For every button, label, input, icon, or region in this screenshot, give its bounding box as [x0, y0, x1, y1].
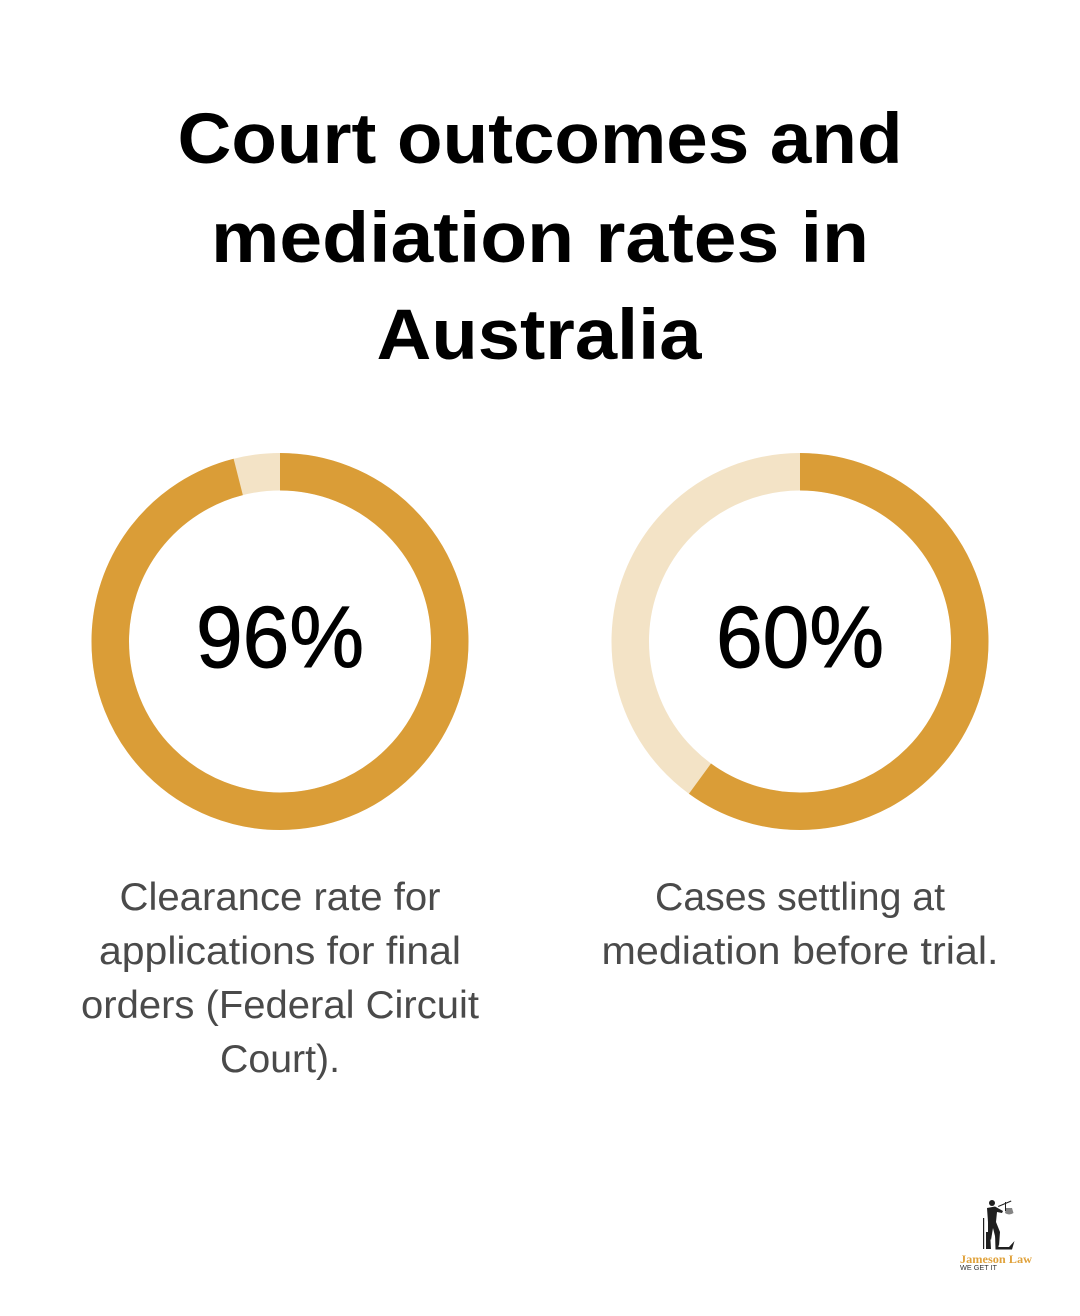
logo: Jameson Law	[960, 1200, 1033, 1272]
title	[178, 100, 902, 375]
description: mediation settlement: Cases settling at	[655, 876, 945, 919]
icon: lady justice	[983, 1200, 1014, 1250]
description: mediation settlement	[602, 876, 998, 973]
title: mediation rates in	[211, 199, 869, 278]
panel: mediation settlement	[602, 472, 998, 973]
panel: clearance rate	[81, 472, 479, 1081]
donut chart: 60%	[630, 472, 970, 811]
title: Australia	[376, 296, 702, 375]
logo name: Jameson Law	[960, 1254, 1033, 1266]
description: mediation settlement: mediation before trial.	[602, 930, 998, 973]
donut chart: 96%	[110, 472, 450, 811]
description: clearance rate	[81, 876, 479, 1081]
description: clearance rate: applications for final	[99, 930, 461, 973]
description: clearance rate: Clearance rate for	[120, 876, 441, 919]
logo tagline: WE GET IT	[960, 1265, 998, 1272]
description: clearance rate: orders (Federal Circuit	[81, 984, 479, 1027]
description: clearance rate: Court).	[220, 1038, 340, 1081]
stat: 96%: 96%	[196, 589, 364, 686]
title: Court outcomes and	[178, 100, 902, 179]
stat: 60%: 60%	[716, 589, 884, 686]
